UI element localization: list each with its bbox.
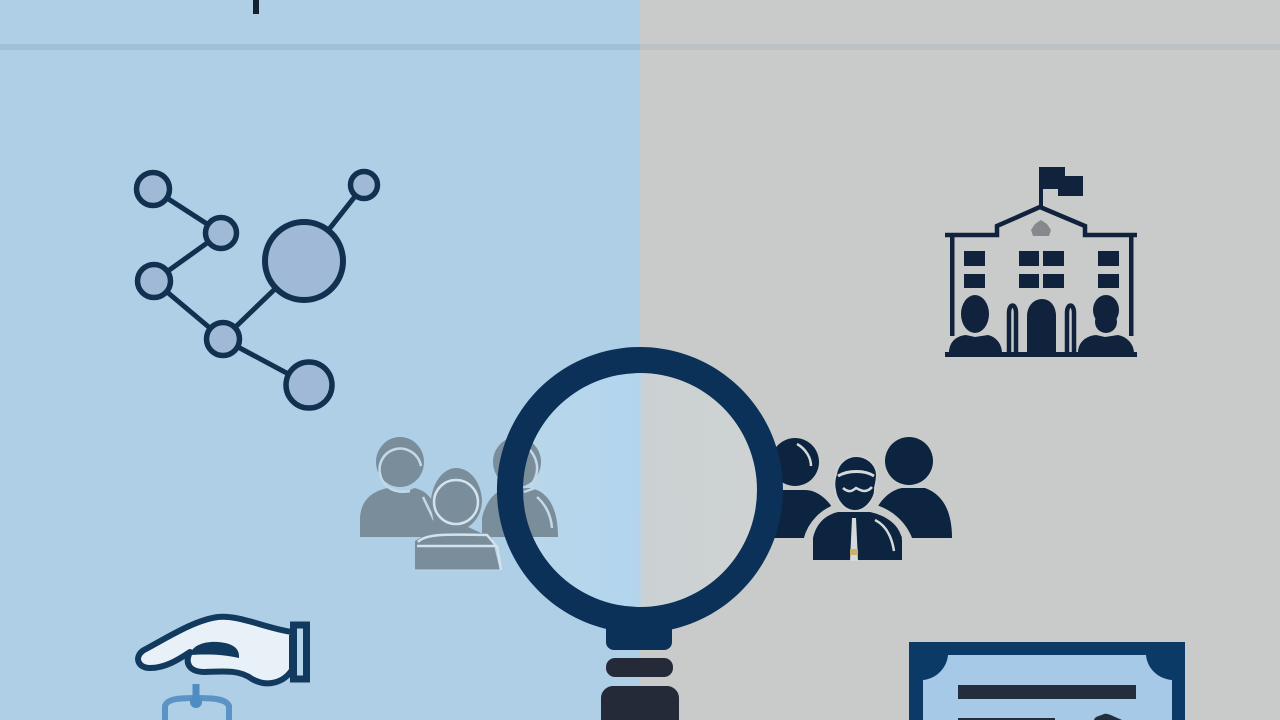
icon: blue scale fragment bbox=[165, 684, 229, 720]
lens glass bbox=[522, 372, 758, 608]
panel: right grey background bbox=[640, 0, 1280, 720]
icon: school building bbox=[945, 167, 1137, 357]
icon: dark people group bbox=[770, 437, 952, 561]
icon: certificate bbox=[909, 642, 1185, 720]
heading fragment bbox=[253, 0, 259, 14]
icon: network graph bbox=[136, 172, 378, 408]
lens ring bbox=[497, 347, 783, 633]
icon: magnifying glass bbox=[497, 347, 783, 720]
icon: muted people group bbox=[360, 437, 558, 570]
handle grip bbox=[601, 686, 679, 720]
handle neck bbox=[606, 622, 672, 650]
panel: left blue background bbox=[0, 0, 640, 720]
icon: hand bbox=[138, 617, 306, 683]
handle band bbox=[606, 658, 673, 677]
